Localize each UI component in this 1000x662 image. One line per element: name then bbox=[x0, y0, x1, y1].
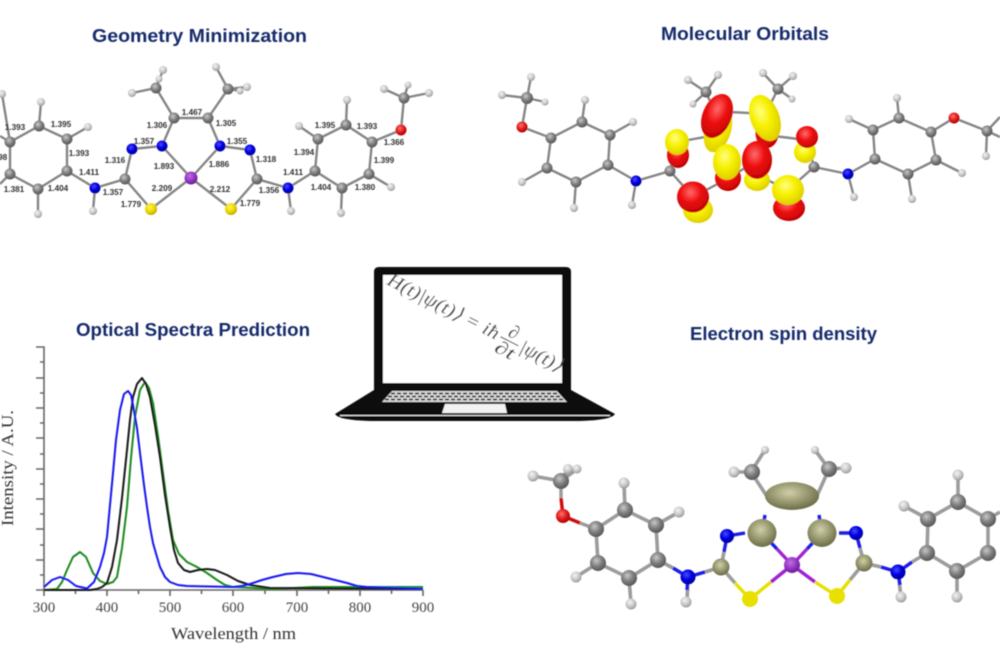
x axis tick labels bbox=[33, 600, 434, 616]
bond length labels: 1.381 bbox=[4, 185, 25, 194]
equation: ∂t bbox=[491, 337, 519, 365]
bond length labels: 1.318 bbox=[256, 155, 277, 164]
equation: |ψ(t)⟩ bbox=[516, 337, 567, 377]
gray bonds bbox=[533, 450, 1000, 604]
bond length labels: 1.395 bbox=[51, 120, 72, 129]
bond length labels: 1.395 bbox=[315, 121, 336, 130]
bond length labels: 2.209 bbox=[152, 184, 173, 193]
carbon atoms bbox=[4, 82, 410, 194]
red bond bbox=[561, 498, 580, 523]
bonds bbox=[0, 67, 429, 214]
x axis tick labels: 300 bbox=[33, 600, 55, 616]
curve: green bbox=[44, 382, 423, 590]
bond length labels: 1.305 bbox=[216, 119, 237, 128]
base highlight bbox=[340, 414, 610, 416]
panel: geometry minimization molecule bbox=[0, 63, 433, 218]
panel: molecular orbitals molecule bbox=[498, 69, 1000, 223]
hydrogen atoms bbox=[528, 446, 964, 610]
bond length labels bbox=[0, 108, 405, 209]
bond length labels: 1.366 bbox=[384, 138, 405, 147]
panel: electron spin density molecule bbox=[528, 446, 1000, 610]
title: Electron spin density: Electron spin density bbox=[690, 324, 877, 344]
bond length labels: 1.467 bbox=[182, 108, 203, 117]
hetero atoms bbox=[556, 509, 906, 607]
trackpad bbox=[442, 404, 507, 413]
keyboard bbox=[382, 391, 567, 402]
x axis tick labels: 800 bbox=[349, 600, 371, 616]
purple bonds bbox=[771, 549, 815, 582]
title: Molecular Orbitals: Molecular Orbitals bbox=[661, 24, 829, 44]
x axis label: Wavelength / nm bbox=[171, 624, 296, 643]
bond length labels: 1.355 bbox=[227, 137, 248, 146]
bond length labels: 1.380 bbox=[355, 183, 376, 192]
x axis tick labels: 700 bbox=[286, 600, 308, 616]
bond length labels: 2.212 bbox=[210, 185, 231, 194]
laptop base bbox=[335, 390, 615, 421]
sulfur, metal and oxygen atoms bbox=[145, 124, 406, 215]
bond length labels: 1.394 bbox=[294, 148, 315, 157]
hydrogen atoms bbox=[0, 63, 433, 218]
equation: H(t)|ψ(t)⟩ = iħ bbox=[383, 269, 503, 344]
bond length labels: 1.779 bbox=[121, 200, 142, 209]
bond length labels: 1.411 bbox=[79, 168, 99, 177]
yellow bonds bbox=[735, 580, 850, 599]
title: Optical Spectra Prediction: Optical Spectra Prediction bbox=[76, 320, 310, 340]
chart: optical spectra bbox=[0, 347, 434, 643]
spin density blobs bbox=[712, 482, 872, 576]
x axis tick labels: 500 bbox=[159, 600, 181, 616]
bond length labels: 1.393 bbox=[69, 149, 90, 158]
bond length labels: 1.393 bbox=[5, 123, 26, 132]
blue bonds bbox=[673, 515, 912, 590]
bond length labels: 1.393 bbox=[357, 122, 378, 131]
equation: ∂ bbox=[505, 321, 523, 344]
curve: blue bbox=[44, 391, 423, 589]
hetero atoms bbox=[516, 112, 960, 186]
x axis tick labels: 900 bbox=[412, 600, 434, 616]
bond length labels: 1.306 bbox=[147, 121, 168, 130]
laptop lid bbox=[374, 267, 571, 392]
bond length labels: 1.357 bbox=[103, 188, 124, 197]
bond length labels: 1.779 bbox=[240, 199, 261, 208]
bonds bbox=[502, 73, 1000, 208]
bond length labels: 1.411 bbox=[283, 168, 303, 177]
carbon atoms bbox=[553, 461, 996, 586]
laptop screen bbox=[383, 275, 562, 383]
icon: laptop with Schrodinger equation bbox=[335, 261, 615, 421]
axes and ticks bbox=[36, 347, 423, 596]
bond length labels: 1.404 bbox=[48, 184, 69, 193]
bond length labels: 1.893 bbox=[154, 162, 175, 171]
curve: black bbox=[44, 378, 423, 590]
bond length labels: 1.357 bbox=[134, 137, 155, 146]
x axis tick labels: 600 bbox=[222, 600, 244, 616]
bond length labels: 1.316 bbox=[105, 156, 126, 165]
equation bbox=[378, 261, 571, 387]
x axis tick labels: 400 bbox=[96, 600, 118, 616]
carbon atoms bbox=[521, 84, 992, 188]
hydrogen atoms bbox=[498, 69, 990, 212]
bond length labels: 1.399 bbox=[374, 156, 395, 165]
nitrogen atoms bbox=[90, 140, 294, 194]
bond length labels: 1.404 bbox=[311, 183, 332, 192]
bond length labels: 1.356 bbox=[259, 186, 280, 195]
bond length labels: 1.886 bbox=[209, 160, 230, 169]
orbital lobes bbox=[665, 89, 818, 223]
title: Geometry Minimization: Geometry Minimization bbox=[92, 26, 307, 46]
